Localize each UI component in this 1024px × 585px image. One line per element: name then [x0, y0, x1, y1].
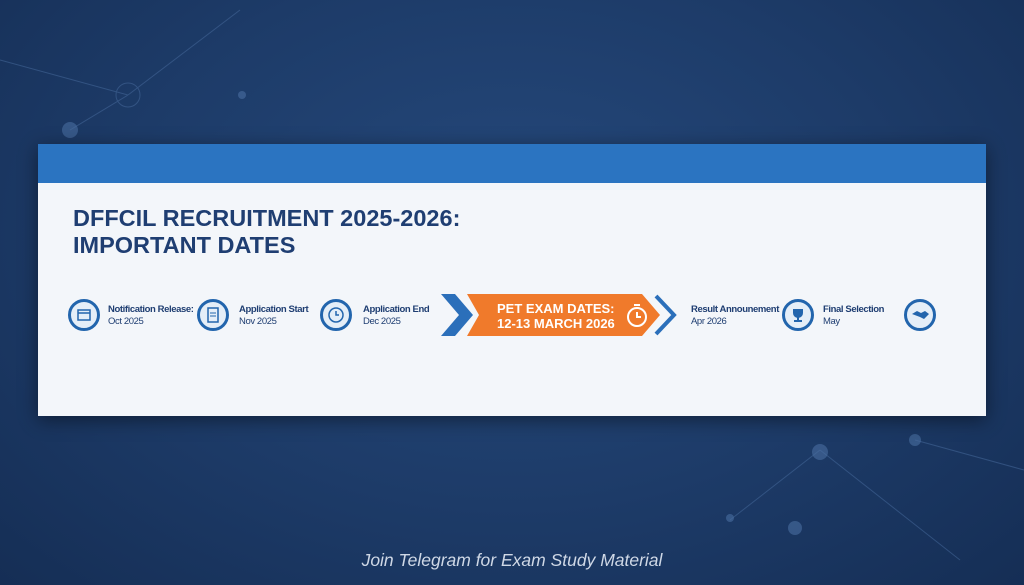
arrow: chevron left: [441, 294, 473, 336]
text: notification: [108, 304, 194, 327]
title: [73, 205, 460, 258]
text: application start: [239, 304, 309, 327]
title: DFFCIL RECRUITMENT 2025-2026:: [73, 205, 460, 231]
text: application end: [363, 304, 430, 327]
arrow: chevron right: [654, 294, 677, 336]
text: result: Apr 2026: [691, 316, 726, 327]
text: notification: Oct 2025: [108, 316, 143, 327]
icon: handshake: [904, 299, 936, 331]
text: notification: Notification Release:: [108, 304, 194, 315]
callout: PET exam dates: 12-13 MARCH 2026: [497, 316, 615, 331]
text: application start: Application Start: [239, 304, 308, 315]
title: IMPORTANT DATES: [73, 232, 295, 258]
callout: PET exam dates: [467, 294, 660, 336]
text: application end: Dec 2025: [363, 316, 400, 327]
text: final selection: May: [823, 316, 840, 327]
text: result: [691, 304, 780, 327]
text: final selection: [823, 304, 884, 327]
footer text: Join Telegram for Exam Study Material: [362, 550, 662, 570]
icon: trophy: [782, 299, 814, 331]
header bar: [38, 144, 986, 183]
icon: document: [197, 299, 229, 331]
text: application end: Application End: [363, 304, 429, 315]
panel: dates card: [38, 144, 986, 416]
text: final selection: Final Selection: [823, 304, 884, 315]
icon: calendar: [68, 299, 100, 331]
text: application start: Nov 2025: [239, 316, 276, 327]
text: result: Result Announement: [691, 304, 779, 315]
callout: PET exam dates: PET EXAM DATES:: [497, 301, 614, 316]
icon: clock: [320, 299, 352, 331]
